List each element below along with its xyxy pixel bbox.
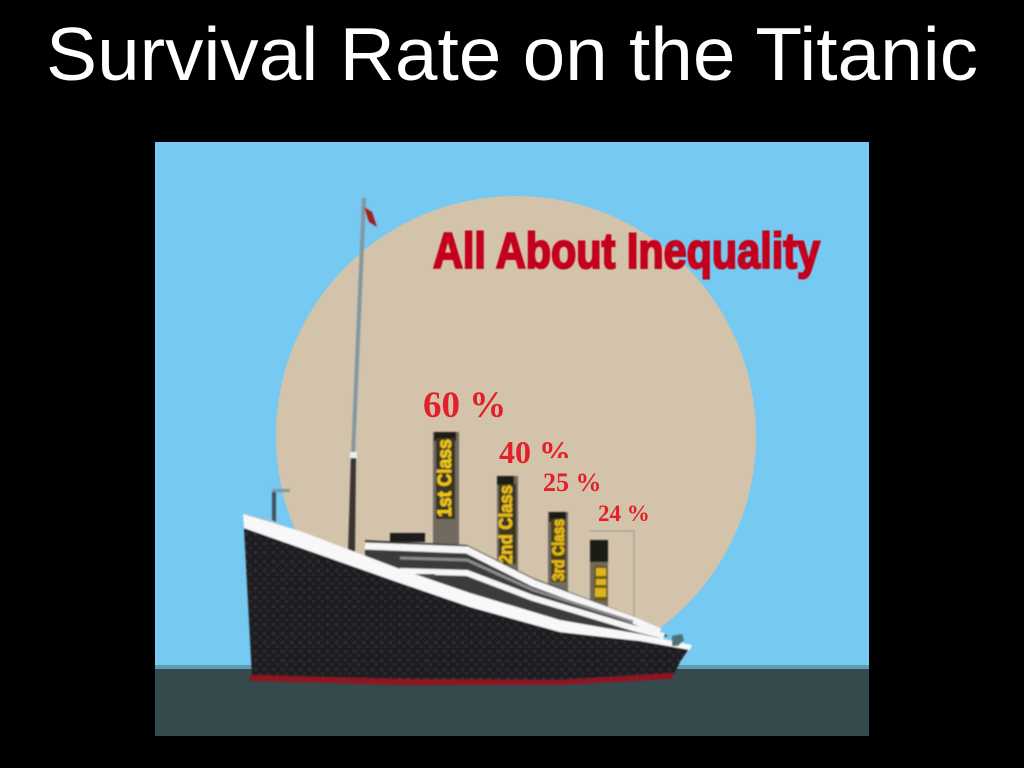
panel: illustration	[155, 142, 869, 736]
funnel: 3rd class: 3rd Class	[549, 519, 568, 581]
icon: bow mast	[672, 634, 684, 646]
heading: all about inequality: All About Inequality	[433, 223, 820, 279]
deck white stripe	[243, 514, 692, 650]
tan sun circle	[276, 196, 756, 676]
funnel: 4th, marking illegible in reference	[590, 540, 608, 608]
label: 2nd class 40%: 40 %	[499, 434, 571, 470]
funnel: 1st class: 1st Class	[435, 439, 456, 517]
funnel: 1st class	[433, 432, 459, 546]
title: Survival Rate on the Titanic	[46, 12, 978, 96]
thin rigging lines	[590, 531, 634, 625]
hull red waterline	[250, 673, 673, 685]
sea	[155, 665, 869, 736]
sky background	[155, 142, 869, 736]
ship	[243, 198, 692, 685]
tan patch over percent	[533, 458, 576, 466]
icon: stern mast	[244, 489, 290, 530]
ship hull	[244, 528, 690, 682]
label: fourth funnel 24%: 24 %	[598, 501, 650, 526]
funnel: 2nd class: 2nd Class	[496, 485, 516, 564]
label: 1st class 60%: 60 %	[423, 385, 506, 426]
label: 3rd class 25%: 25 %	[543, 468, 602, 497]
ship superstructure decks	[365, 533, 668, 642]
icon: mast and flag	[348, 198, 377, 552]
